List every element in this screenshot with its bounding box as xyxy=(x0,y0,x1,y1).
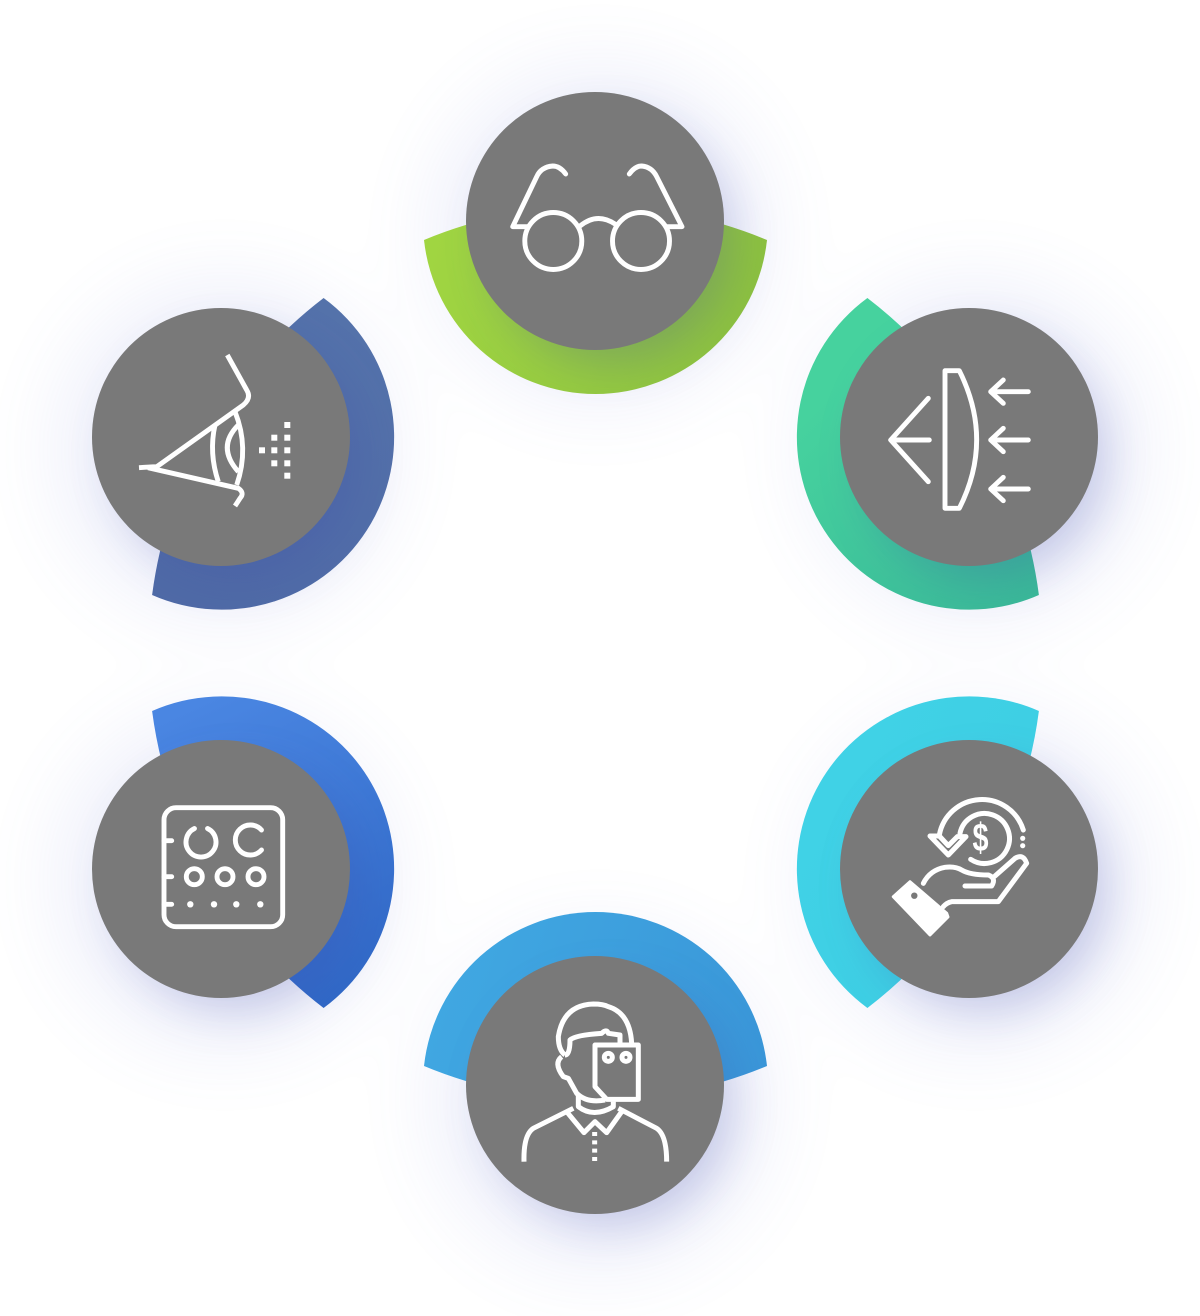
icon: glasses xyxy=(513,166,682,270)
segment: sky blue arc xyxy=(424,912,767,1100)
segment: navy arc xyxy=(152,298,394,610)
icon: hand with dollar xyxy=(893,800,1027,935)
icon: lens with light rays xyxy=(891,371,1028,508)
circle shadows xyxy=(117,121,1105,1225)
badge: eye chart xyxy=(92,740,350,998)
segment: cyan arc xyxy=(797,696,1039,1008)
badge: lens xyxy=(840,308,1098,566)
icon: eye cross-section xyxy=(139,355,290,506)
badge: eye anatomy xyxy=(92,308,350,566)
segment: green arc xyxy=(424,206,767,394)
segment: teal arc xyxy=(797,298,1039,610)
icon: person covering eye xyxy=(524,1004,667,1162)
badge: person with eye test card xyxy=(466,956,724,1214)
badge: money back hand xyxy=(840,740,1098,998)
icon: eye chart xyxy=(164,808,283,927)
badge: glasses xyxy=(466,92,724,350)
icon: hand with dollar: $ xyxy=(972,815,989,860)
segment: royal blue arc xyxy=(152,696,394,1008)
